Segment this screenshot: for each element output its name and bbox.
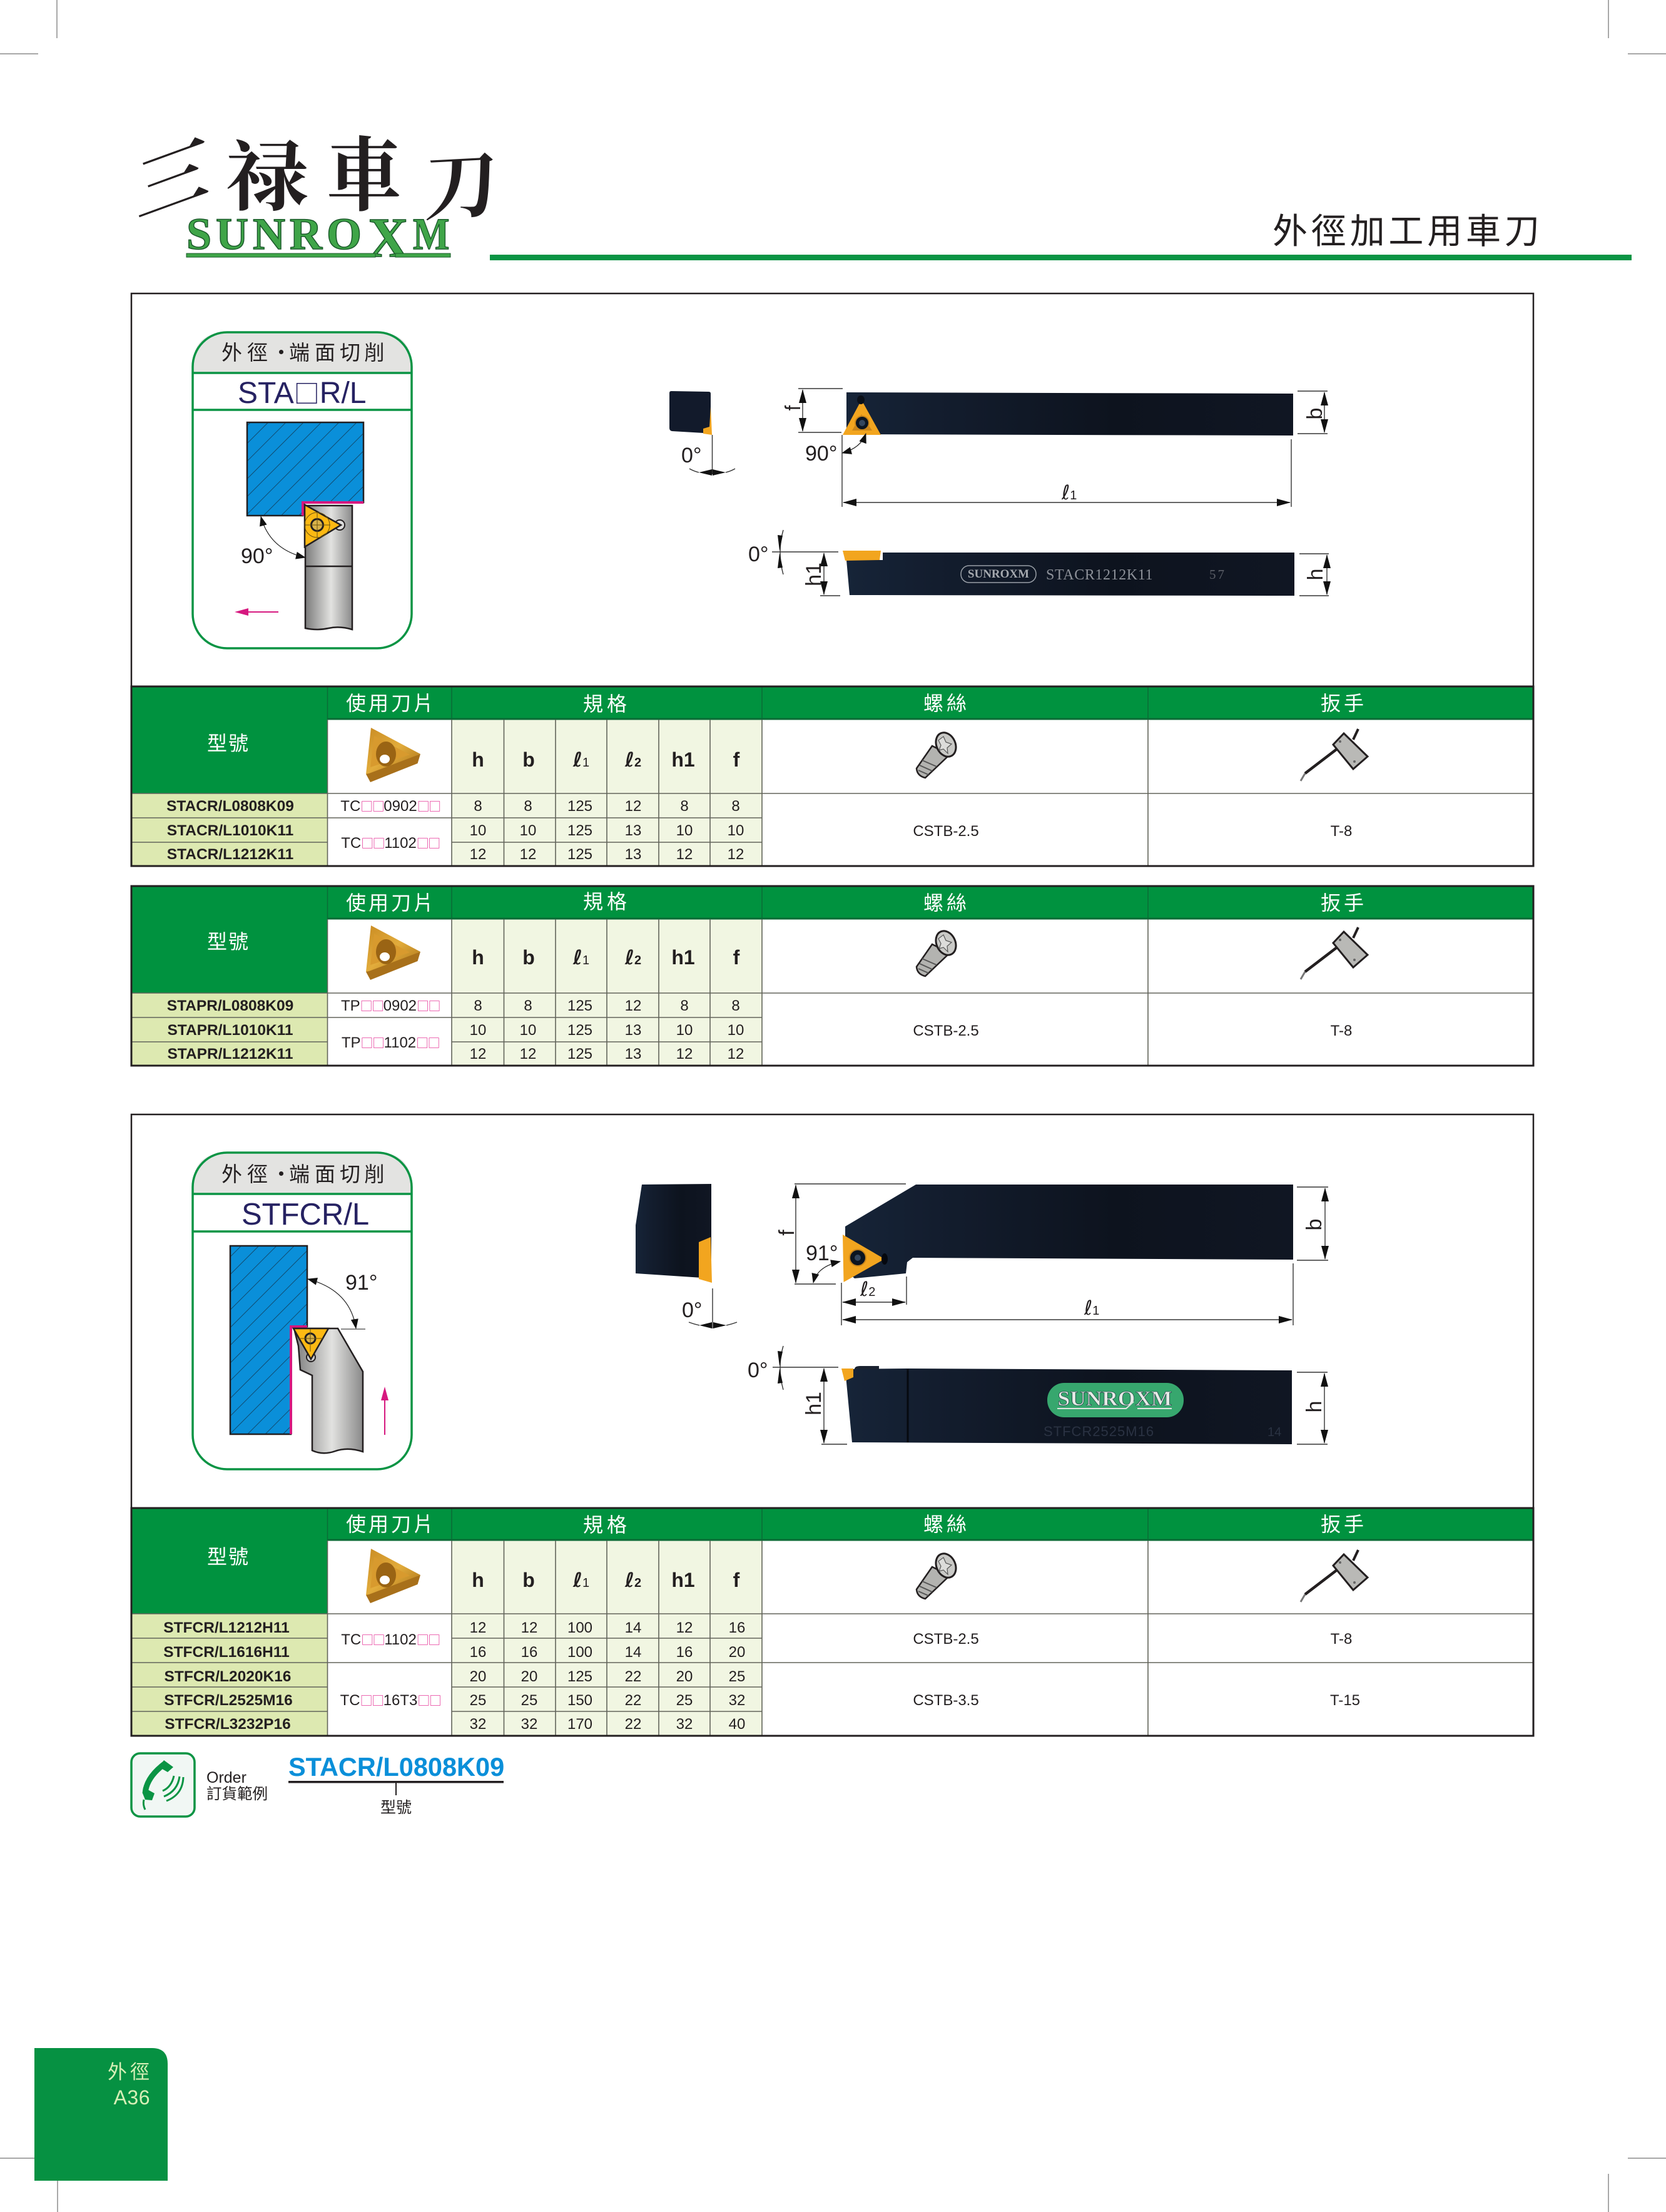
dimension l1 [842, 435, 1291, 507]
rows: 10 [676, 822, 693, 839]
rows: TC□□16T3□□ [340, 1691, 440, 1709]
spec column letters: b [522, 1569, 535, 1591]
table header band: 型號 [207, 1541, 250, 1570]
table: STAC specs [131, 686, 1533, 866]
diagram: STA end view [669, 391, 735, 476]
order label: Order [206, 1769, 246, 1786]
rows: 8 [731, 798, 740, 815]
dimension angle 0 [748, 530, 838, 574]
rows: 10 [676, 1022, 693, 1039]
dimension f [781, 389, 843, 432]
rows: 12 [676, 1619, 693, 1636]
dimension b: b [1303, 408, 1327, 419]
rows: 8 [680, 798, 689, 815]
rows: CSTB-2.5 [913, 1022, 979, 1039]
badge heading: 外徑・端面切削 [221, 1158, 385, 1188]
dimension angle 91: 91° [806, 1241, 838, 1265]
rows: 12 [521, 1619, 537, 1636]
spec column letters: ℓ1 [572, 748, 589, 772]
rows: CSTB-2.5 [913, 823, 979, 840]
rows: CSTB-3.5 [913, 1692, 979, 1709]
table header band: 型號 [207, 728, 250, 757]
badge heading: 外徑・端面切削 [221, 336, 385, 366]
rows: 32 [676, 1716, 693, 1733]
rows: CSTB-2.5 [913, 1631, 979, 1648]
panel: STA tool holder diagram frame [131, 293, 1533, 686]
rows: T-8 [1331, 1022, 1352, 1039]
rows: 12 [520, 846, 536, 863]
order example code: STACR/L0808K09 [288, 1752, 504, 1781]
icon: order telephone [131, 1753, 195, 1817]
dimension h1: h1 [802, 563, 826, 586]
rows: 16 [676, 1644, 693, 1661]
table header band: 螺絲 [923, 1509, 970, 1537]
rows: 125 [567, 846, 592, 863]
rows: 170 [567, 1716, 592, 1733]
rows: 12 [470, 1619, 486, 1636]
dimension l1: ℓ1 [1061, 481, 1077, 504]
rows: 32 [470, 1716, 486, 1733]
workpiece [247, 422, 363, 516]
diagram: STFC side view [748, 1346, 1328, 1444]
icon: wrench [1301, 927, 1368, 979]
engraved logo: 57 [1209, 567, 1226, 582]
rows: 12 [676, 846, 693, 863]
dimension b: b [1303, 1219, 1326, 1230]
cut path [303, 502, 363, 516]
icon: wrench [1301, 729, 1368, 781]
feed arrow [235, 608, 278, 616]
rows: STFCR/L2525M16 [164, 1692, 293, 1709]
spec column letters: f [733, 1569, 740, 1591]
panel: STA badge [193, 332, 412, 648]
rows: 14 [625, 1644, 641, 1661]
dimension angle 90: 90° [805, 442, 837, 466]
dimension h [1297, 1372, 1328, 1444]
rows: 10 [520, 1022, 536, 1039]
spec column letters: h [472, 1569, 484, 1591]
rows: STACR/L0808K09 [166, 798, 294, 815]
grid [131, 1541, 1533, 1736]
rows: TC□□1102□□ [341, 1630, 440, 1648]
rows: 22 [625, 1668, 641, 1685]
rows: 8 [731, 997, 740, 1014]
rows: 14 [625, 1619, 641, 1636]
panel: STFCR/L badge [193, 1153, 412, 1469]
table header band: 螺絲 [923, 887, 970, 916]
dimension h: h [1303, 1401, 1326, 1412]
insert [305, 504, 345, 547]
dimension h: h [1304, 569, 1328, 580]
table: STFC specs [131, 1508, 1533, 1736]
spec column letters: f [733, 946, 740, 969]
diagram: STFC end view: 0° [682, 1298, 703, 1322]
spec column letters: h1 [671, 1569, 695, 1591]
rows: 8 [680, 997, 689, 1014]
diagram: STA top view [781, 389, 1328, 507]
spec column letters: ℓ1 [572, 945, 589, 969]
tool holder [305, 506, 352, 629]
diagram: STA side view [748, 530, 1329, 596]
dimension h [1299, 554, 1329, 596]
icon: wrench [1301, 1550, 1368, 1602]
rows: 12 [625, 997, 641, 1014]
rows: 10 [470, 822, 486, 839]
order example code [288, 1752, 504, 1818]
rows: T-8 [1331, 823, 1352, 840]
table header band: 扳手 [1321, 887, 1367, 916]
page title: 外徑加工用車刀 [1272, 203, 1543, 254]
badge model code: STA□R/L [238, 373, 367, 410]
rows: 32 [521, 1716, 537, 1733]
logo calligraphy characters: 車 [327, 111, 402, 227]
dimension angle 0: 0° [748, 543, 769, 566]
rows: 25 [521, 1692, 537, 1709]
rows: 150 [567, 1692, 592, 1709]
icon: screw [917, 730, 960, 778]
rows: 100 [567, 1619, 592, 1636]
rows: 40 [729, 1716, 745, 1733]
rows: STAPR/L1212K11 [167, 1046, 293, 1063]
rows: 20 [676, 1668, 693, 1685]
dimension h1 [802, 1368, 847, 1444]
table header band [131, 1508, 1533, 1614]
rows: 12 [676, 1046, 693, 1063]
engraved model text: 14 [1267, 1425, 1281, 1439]
diagram: STFC end view [636, 1184, 737, 1328]
rows: STACR/L1010K11 [167, 822, 293, 839]
angle 91 [308, 1271, 377, 1329]
side tab: section and page number: A36 [114, 2086, 150, 2109]
rows [166, 797, 1352, 863]
spec column letters: ℓ2 [624, 1568, 641, 1592]
rows: 10 [520, 822, 536, 839]
rows: 12 [625, 798, 641, 815]
rows: 10 [728, 1022, 744, 1039]
order label [206, 1769, 268, 1804]
rows: 12 [520, 1046, 536, 1063]
rows: TC□□1102□□ [341, 833, 440, 852]
rows [163, 1619, 1360, 1733]
rows: 12 [728, 1046, 744, 1063]
spec column letters [472, 945, 740, 969]
dimension f: f [781, 405, 805, 410]
table header band: 使用刀片 [346, 1509, 436, 1537]
SUNROXM wordmark: M [413, 209, 449, 259]
dimension angle 0: 0° [748, 1358, 768, 1382]
spec column letters [472, 1568, 740, 1592]
table header band: 螺絲 [923, 688, 970, 716]
tool holder [294, 1328, 363, 1453]
spec column letters: b [522, 946, 535, 969]
dimension b [1297, 1187, 1328, 1260]
rows: 16 [729, 1619, 745, 1636]
dimension b [1298, 391, 1328, 434]
rows: 10 [470, 1022, 486, 1039]
spec column letters: h1 [671, 748, 695, 771]
rows: TC□□0902□□ [340, 797, 440, 815]
rows: STFCR/L2020K16 [165, 1668, 291, 1685]
dimension angle 0 [748, 1346, 838, 1390]
heading bar [490, 255, 1632, 260]
rows: 8 [524, 997, 532, 1014]
spec column letters: h [472, 946, 484, 969]
dimension f [775, 1184, 906, 1284]
side tab: section and page number [34, 2048, 168, 2181]
rows: 12 [470, 1046, 486, 1063]
insert [293, 1328, 328, 1362]
rows: 12 [470, 846, 486, 863]
engraved logo [961, 566, 1226, 583]
rows: 12 [728, 846, 744, 863]
table header band: 使用刀片 [346, 688, 436, 716]
grid [131, 919, 1533, 1066]
angle 91: 91° [345, 1271, 377, 1295]
rows: 25 [729, 1668, 745, 1685]
diagram: STA end view: 0° [681, 444, 702, 467]
rows: STAPR/L0808K09 [167, 997, 293, 1014]
rows: 125 [567, 1022, 592, 1039]
logo calligraphy characters: 三 [136, 107, 210, 240]
rows: TP□□1102□□ [342, 1033, 439, 1051]
table: STAP specs [131, 886, 1533, 1066]
dimension l2: ℓ2 [860, 1277, 875, 1301]
order label: 訂貨範例 [206, 1782, 268, 1804]
engraved logo: SUNROXM [968, 568, 1029, 581]
spec column letters: h [472, 748, 484, 771]
spec column letters: ℓ2 [624, 748, 641, 772]
table header band: 規格 [583, 1509, 631, 1538]
SUNROXM wordmark: SUNRO [186, 209, 366, 259]
rows: 32 [729, 1692, 745, 1709]
rows: 13 [625, 1022, 641, 1039]
SUNROXM wordmark [186, 207, 450, 269]
spec column letters [472, 748, 740, 772]
engraved logo: STACR1212K11 [1046, 567, 1153, 583]
rows: 125 [567, 798, 592, 815]
rows: 20 [521, 1668, 537, 1685]
workpiece [230, 1246, 307, 1434]
rows: 22 [625, 1716, 641, 1733]
icon: screw [917, 1551, 960, 1599]
spec column letters: f [733, 748, 740, 771]
rows: 13 [625, 846, 641, 863]
angle 90: 90° [241, 544, 273, 568]
logo calligraphy characters [136, 107, 498, 240]
dimension h1 [802, 553, 840, 596]
rows: 8 [524, 798, 532, 815]
green logo plate: SUNROXM [1057, 1387, 1172, 1410]
table header band: 使用刀片 [346, 887, 436, 916]
SUNROXM wordmark: X [368, 207, 409, 269]
rows: 100 [567, 1644, 592, 1661]
diagram: STFC top view [775, 1184, 1328, 1325]
rows: STFCR/L1616H11 [163, 1644, 290, 1661]
spec column letters: h1 [671, 946, 695, 969]
panel: STFC tool holder diagram frame [131, 1114, 1533, 1508]
insert photo [366, 925, 420, 980]
icon: screw [917, 928, 960, 976]
rows: 10 [728, 822, 744, 839]
dimension l1: ℓ1 [1084, 1296, 1099, 1320]
logo: brand name and SUNROXM wordmark [136, 107, 498, 269]
dimension h1: h1 [802, 1392, 826, 1415]
rows: TP□□0902□□ [341, 996, 440, 1014]
table header band: 規格 [583, 886, 631, 915]
table header band [131, 686, 1533, 793]
side tab: section and page number: 外徑 [108, 2056, 153, 2084]
rows [167, 996, 1352, 1063]
logo calligraphy characters: 刀 [424, 125, 498, 235]
rows: 22 [625, 1692, 641, 1709]
order example code: 型號 [380, 1795, 412, 1818]
rows: 20 [470, 1668, 486, 1685]
table header band: 扳手 [1321, 1509, 1367, 1537]
rows: T-15 [1330, 1692, 1360, 1709]
spec column letters: ℓ1 [572, 1568, 589, 1592]
rows: 13 [625, 1046, 641, 1063]
rows: 125 [567, 1668, 592, 1685]
rows: 8 [474, 798, 482, 815]
rows: 125 [567, 997, 592, 1014]
logo calligraphy characters: 禄 [226, 117, 308, 227]
rows: STFCR/L1212H11 [163, 1619, 290, 1636]
spec column letters: b [522, 748, 535, 771]
rows: 25 [676, 1692, 693, 1709]
engraved model text: STFCR2525M16 [1044, 1424, 1154, 1439]
table header band: 規格 [583, 688, 631, 717]
rows: 16 [521, 1644, 537, 1661]
table header band: 扳手 [1321, 688, 1367, 716]
green logo plate [1047, 1383, 1184, 1417]
cut path [291, 1327, 307, 1434]
dimension f: f [775, 1230, 799, 1236]
insert photo [366, 728, 420, 782]
dimension angle 90 [805, 434, 866, 466]
engraved model text [1044, 1424, 1281, 1439]
rows: STACR/L1212K11 [167, 846, 293, 863]
spec column letters: ℓ2 [624, 945, 641, 969]
rows: STFCR/L3232P16 [165, 1716, 291, 1733]
rows: 20 [729, 1644, 745, 1661]
rows: 13 [625, 822, 641, 839]
table header band: 型號 [207, 926, 250, 955]
grid [131, 720, 1533, 866]
rows: 8 [474, 997, 482, 1014]
feed arrow [381, 1387, 389, 1435]
badge model code: STFCR/L [241, 1198, 369, 1231]
rows: 25 [470, 1692, 486, 1709]
angle 90 [241, 517, 305, 568]
rows: STAPR/L1010K11 [167, 1022, 293, 1039]
rows: T-8 [1331, 1631, 1352, 1648]
rows: 125 [567, 822, 592, 839]
rows: 125 [567, 1046, 592, 1063]
rows: 16 [470, 1644, 486, 1661]
dimension l2 [841, 1277, 907, 1325]
insert photo [366, 1549, 420, 1603]
table header band [131, 886, 1533, 993]
dimension angle 91 [806, 1241, 840, 1283]
